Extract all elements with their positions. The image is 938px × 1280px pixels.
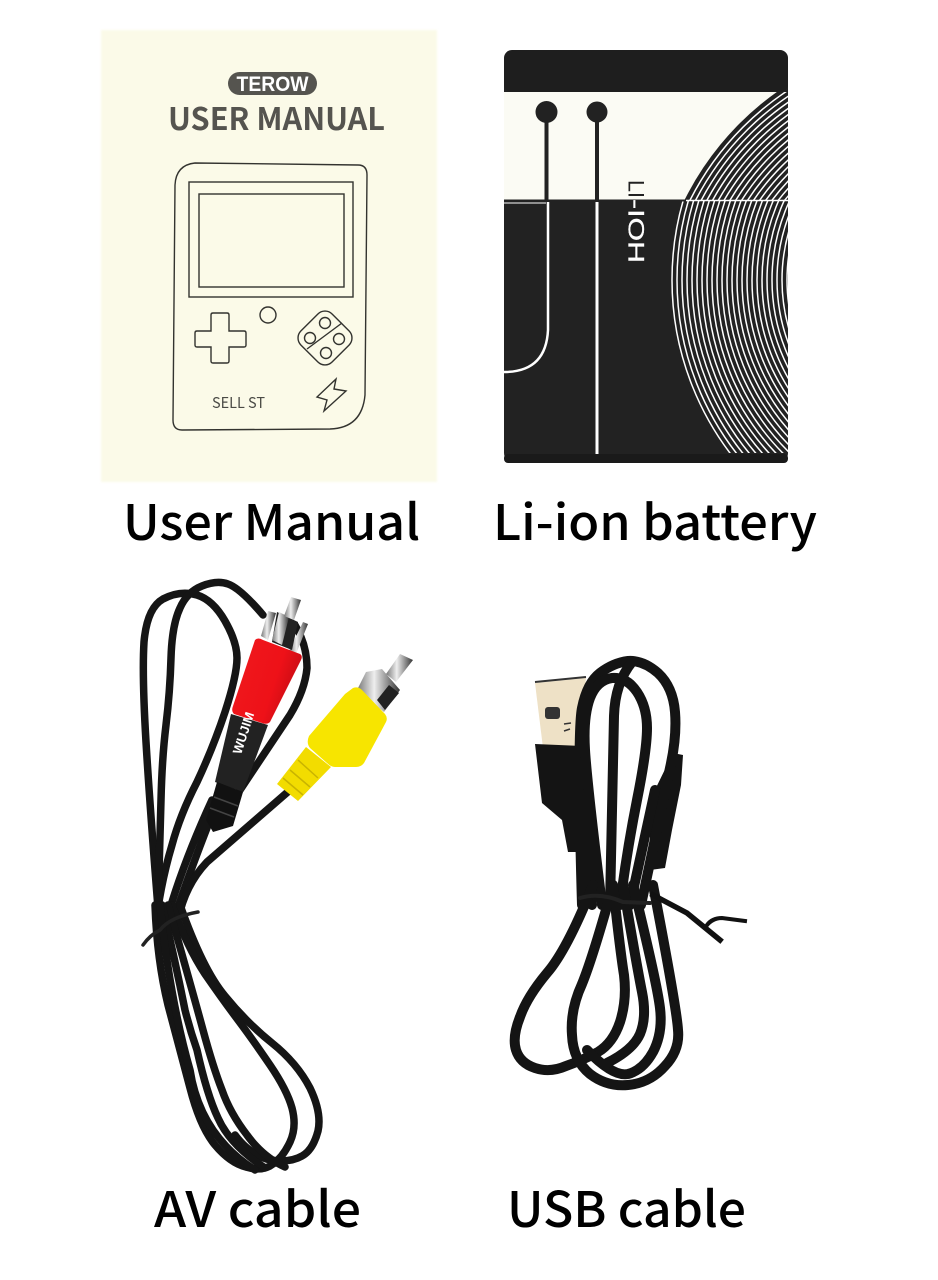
yellow plug metal bbox=[357, 654, 413, 712]
battery terminal right bbox=[586, 102, 608, 201]
plug brand text: WUJIM bbox=[230, 710, 257, 756]
label: li-ion battery: Li-ion battery bbox=[493, 484, 817, 555]
label: AV cable: AV cable bbox=[154, 1171, 361, 1242]
battery body bbox=[504, 50, 788, 463]
cable loops lower bbox=[155, 905, 319, 1170]
red plug metal bbox=[261, 597, 308, 654]
panel: li-ion battery bbox=[504, 50, 788, 463]
console outline bbox=[173, 163, 367, 430]
cable tie bbox=[143, 912, 198, 945]
manual title: USER MANUAL bbox=[168, 94, 385, 139]
panel: AV cable bbox=[143, 582, 413, 1170]
black plug stem bbox=[215, 714, 268, 792]
second connector body bbox=[650, 753, 683, 870]
straight white trace bbox=[596, 202, 598, 454]
brand pill: TEROW: TEROW bbox=[236, 73, 309, 96]
action buttons bbox=[294, 307, 356, 369]
USB connector body bbox=[535, 744, 582, 852]
icon: lightning bolt bbox=[317, 379, 346, 411]
white label band bbox=[504, 92, 788, 200]
battery type text dark part: LI bbox=[624, 180, 648, 198]
menu button bbox=[260, 307, 276, 323]
curved white trace bbox=[504, 202, 548, 372]
d-pad bbox=[195, 313, 246, 363]
USB cable lower loops bbox=[515, 885, 678, 1085]
label: USB cable: USB cable bbox=[507, 1171, 746, 1242]
USB cable tie bbox=[580, 895, 745, 940]
yellow strain relief bbox=[277, 747, 331, 801]
USB connector metal bbox=[535, 677, 586, 748]
panel: USB cable bbox=[515, 661, 745, 1085]
console text: SELL ST bbox=[212, 392, 265, 413]
label: user manual: User Manual bbox=[123, 484, 420, 555]
yellow plug bbox=[308, 687, 387, 767]
red plug bbox=[232, 638, 302, 724]
battery top cap bbox=[504, 50, 788, 92]
battery type text white part: -IOH bbox=[624, 199, 648, 263]
cable loops upper bbox=[143, 582, 307, 925]
icon: handheld console line drawing bbox=[173, 163, 367, 430]
manual paper bbox=[101, 30, 437, 482]
USB cable upper loop bbox=[580, 661, 675, 905]
concentric circles on white band bbox=[684, 92, 788, 200]
concentric circles on black area bbox=[671, 201, 788, 453]
panel: user manual booklet bbox=[101, 30, 437, 482]
battery terminal left bbox=[536, 101, 558, 201]
screen frame bbox=[189, 182, 353, 297]
divider line bbox=[504, 200, 686, 202]
screen bbox=[199, 194, 344, 287]
bottom cap shade bbox=[504, 454, 788, 463]
strain relief bbox=[206, 782, 243, 832]
